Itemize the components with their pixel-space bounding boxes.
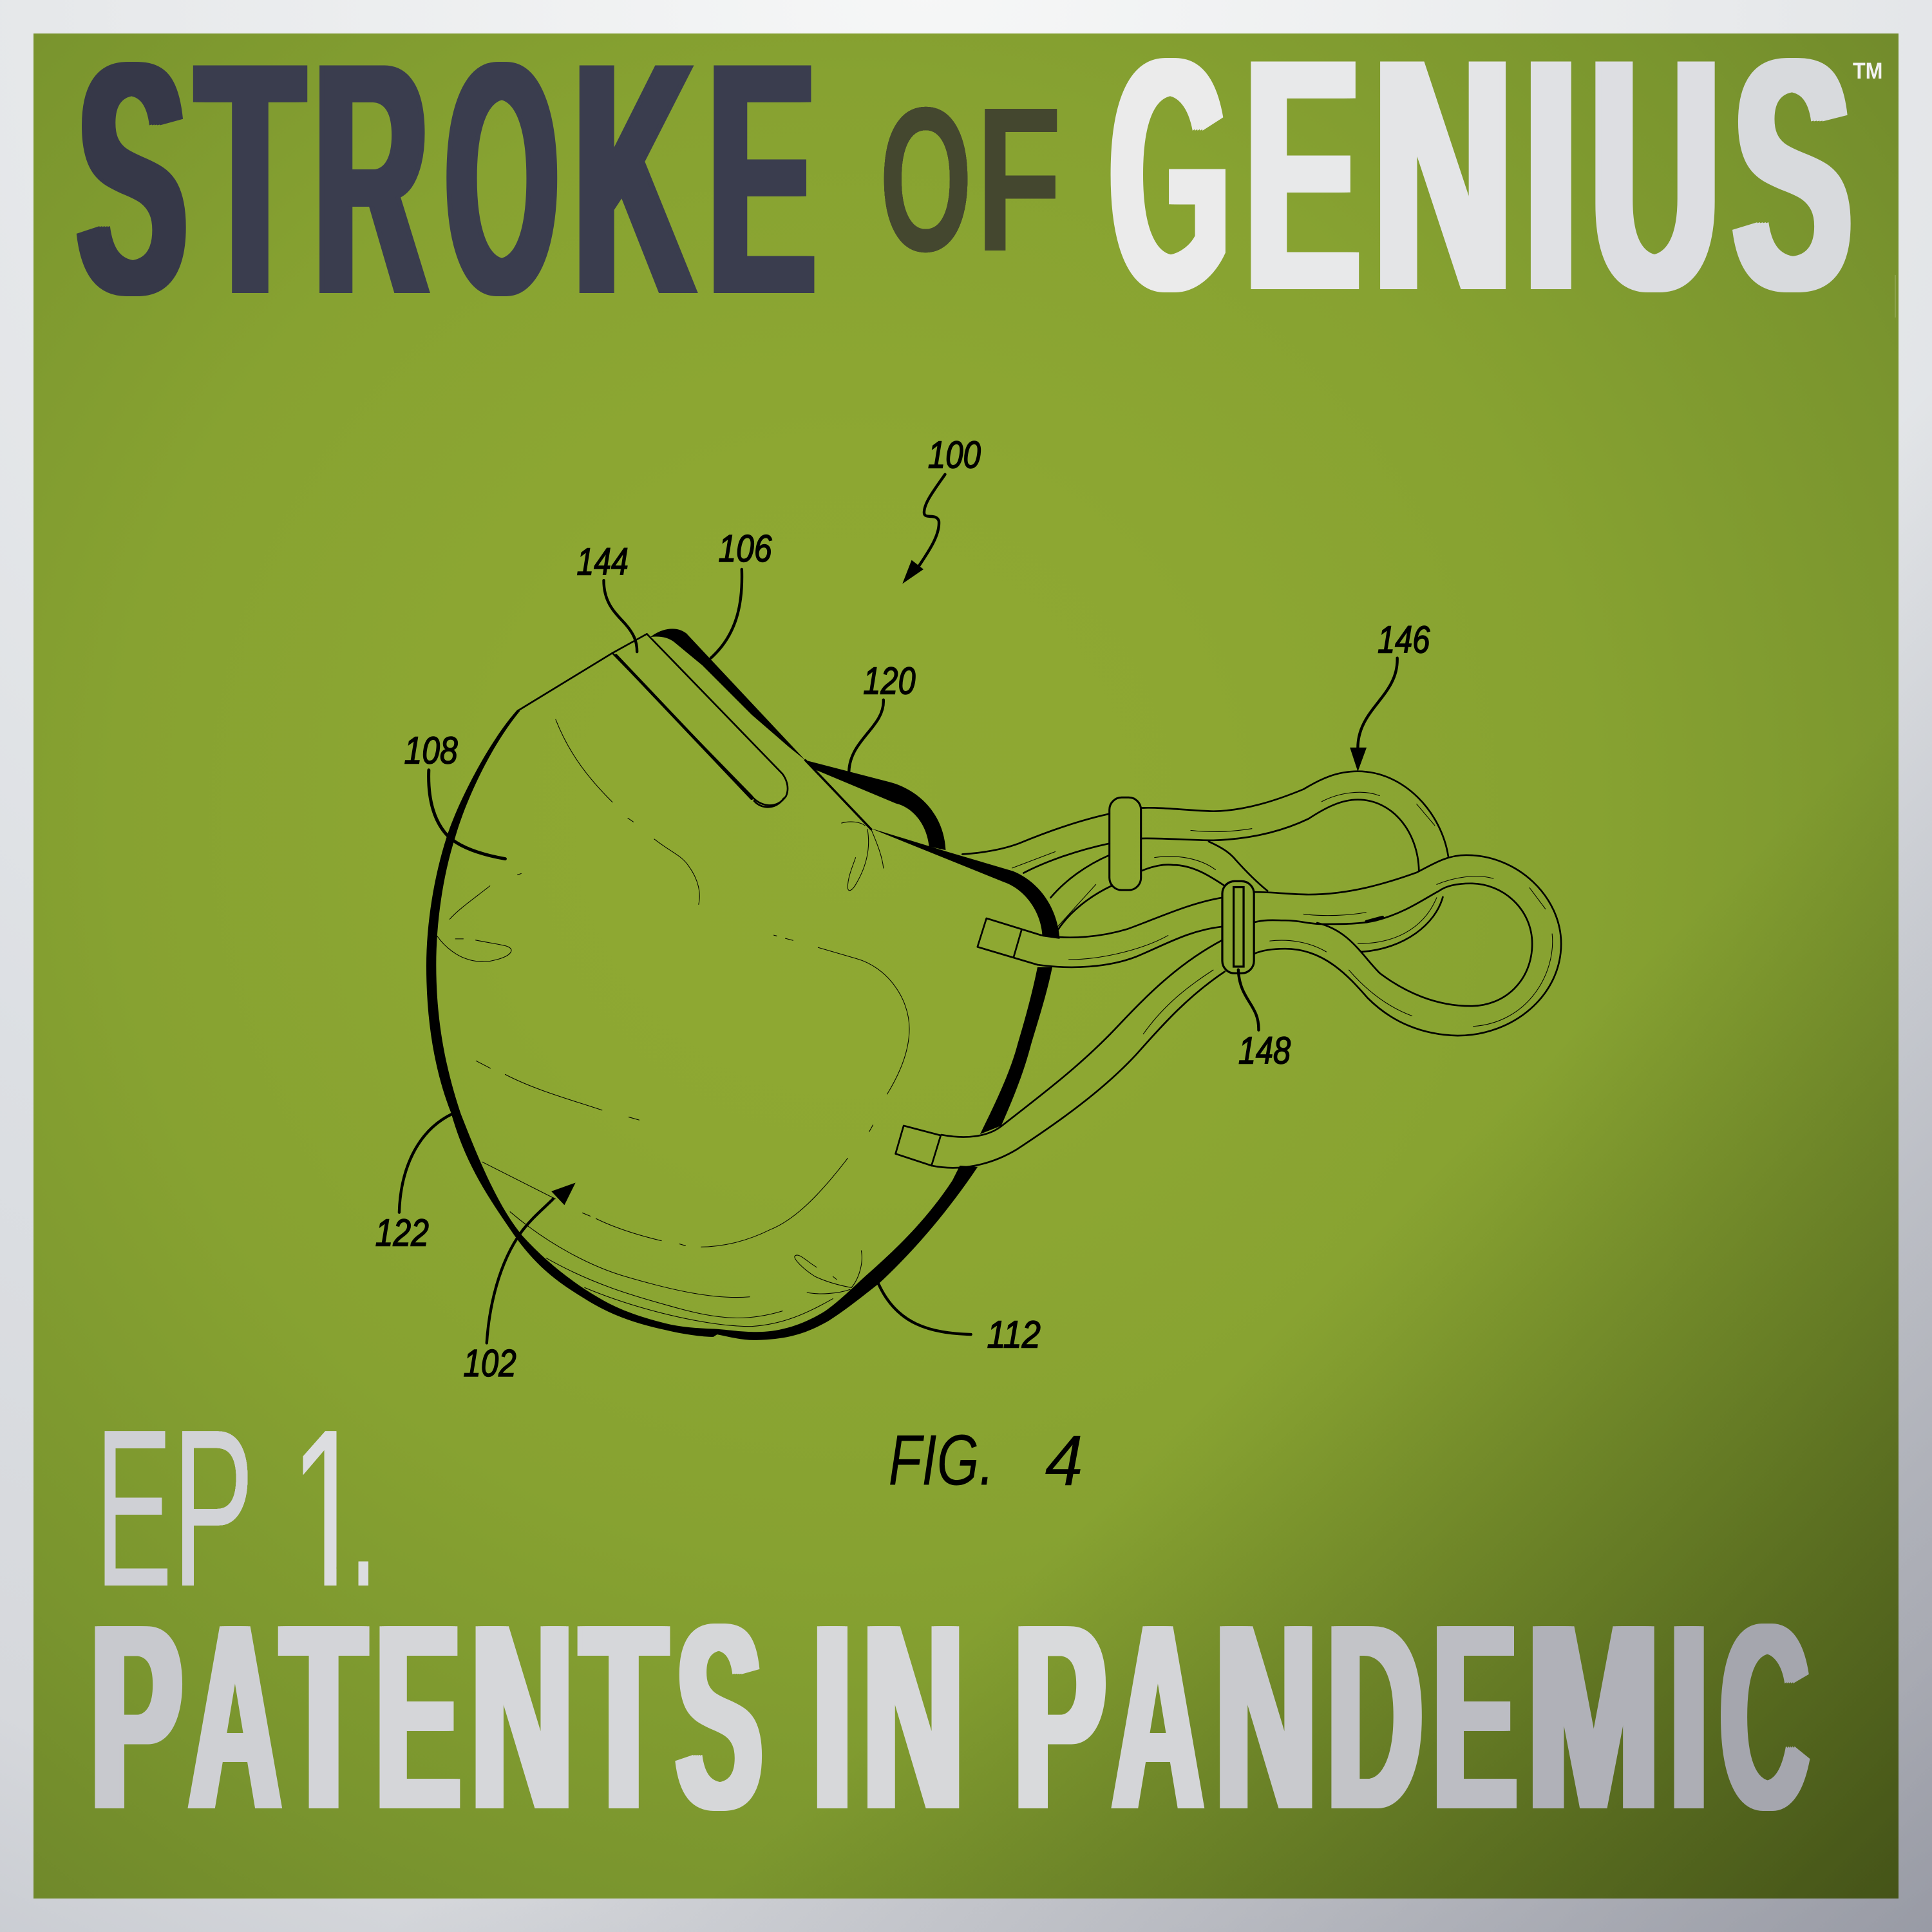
episode title: Patents in Pandemic bbox=[91, 1569, 1810, 1865]
reference numbers: 146 bbox=[1378, 618, 1430, 661]
episode title: Patents in Pandemic: S bbox=[676, 1569, 762, 1865]
heading word: STROKE: E bbox=[708, 0, 815, 363]
reference numbers: 144 bbox=[576, 540, 629, 583]
reference numbers: 112 bbox=[987, 1312, 1041, 1356]
title: Stroke of Genius bbox=[76, 0, 1882, 363]
episode label: EP 1.: P bbox=[173, 1383, 254, 1633]
episode title: Patents in Pandemic: M bbox=[1528, 1569, 1660, 1865]
heading word: STROKE: K bbox=[573, 0, 694, 363]
episode label: EP 1. bbox=[95, 1383, 378, 1633]
episode label: EP 1.: . bbox=[349, 1383, 378, 1633]
heading word: OF: F bbox=[975, 64, 1062, 294]
figure caption: 4 bbox=[1045, 1421, 1083, 1501]
ear strap with adjusters bbox=[896, 772, 1561, 1168]
episode title: Patents in Pandemic: A bbox=[189, 1569, 281, 1865]
episode title: Patents in Pandemic: N bbox=[471, 1569, 573, 1865]
episode title: Patents in Pandemic: I bbox=[1670, 1569, 1709, 1865]
episode title: Patents in Pandemic: T bbox=[581, 1569, 667, 1865]
mask outline bbox=[426, 629, 1059, 1340]
heading word: GENIUS: U bbox=[1590, 0, 1720, 359]
reference numbers: 120 bbox=[863, 659, 916, 703]
nose clip bbox=[518, 634, 871, 829]
reference numbers: 148 bbox=[1238, 1029, 1291, 1072]
trademark mark: TM bbox=[1853, 59, 1882, 84]
reference numbers: 100 bbox=[928, 433, 981, 476]
episode title: Patents in Pandemic: N bbox=[864, 1569, 964, 1865]
reference numbers: 106 bbox=[718, 527, 772, 570]
heading word: GENIUS: S bbox=[1733, 0, 1852, 359]
episode title: Patents in Pandemic: D bbox=[1327, 1569, 1423, 1865]
heading word: GENIUS: E bbox=[1245, 0, 1360, 359]
creases and fold lines bbox=[437, 719, 1553, 1327]
heading word: STROKE: T bbox=[196, 0, 303, 363]
episode title: Patents in Pandemic: A bbox=[1113, 1569, 1204, 1865]
episode label: EP 1.: E bbox=[95, 1383, 173, 1633]
reference numbers: 102 bbox=[463, 1341, 516, 1385]
reference numbers: 122 bbox=[375, 1211, 429, 1254]
episode title: Patents in Pandemic: P bbox=[1014, 1569, 1106, 1865]
episode label: EP 1.: 1 bbox=[290, 1383, 366, 1633]
episode title: Patents in Pandemic: C bbox=[1720, 1569, 1810, 1865]
heading word: GENIUS bbox=[1109, 0, 1852, 359]
heading word: OF bbox=[879, 64, 1062, 294]
reference numbers: 108 bbox=[404, 729, 458, 772]
episode title: Patents in Pandemic: N bbox=[1216, 1569, 1317, 1865]
heading word: STROKE: R bbox=[314, 0, 428, 363]
strap buckle bbox=[1110, 797, 1141, 890]
episode title: Patents in Pandemic: E bbox=[1433, 1569, 1517, 1865]
heading word: GENIUS: N bbox=[1373, 0, 1512, 359]
heading word: STROKE: S bbox=[77, 0, 187, 363]
figure caption: FIG. bbox=[888, 1420, 994, 1500]
episode title: Patents in Pandemic: I bbox=[813, 1569, 852, 1865]
heading word: STROKE bbox=[76, 0, 967, 363]
episode title: Patents in Pandemic: T bbox=[281, 1569, 366, 1865]
episode title: Patents in Pandemic: E bbox=[376, 1569, 461, 1865]
episode title: Patents in Pandemic: P bbox=[91, 1569, 182, 1865]
reference leaders and arrows bbox=[399, 475, 1397, 1343]
strap buckle with slot bbox=[1222, 881, 1254, 973]
heading word: GENIUS: G bbox=[1109, 0, 1230, 359]
heading word: OF: O bbox=[879, 64, 972, 294]
reference numbers bbox=[375, 433, 1430, 1385]
heading word: STROKE: O bbox=[445, 0, 558, 363]
heading word: GENIUS: I bbox=[1524, 0, 1578, 359]
